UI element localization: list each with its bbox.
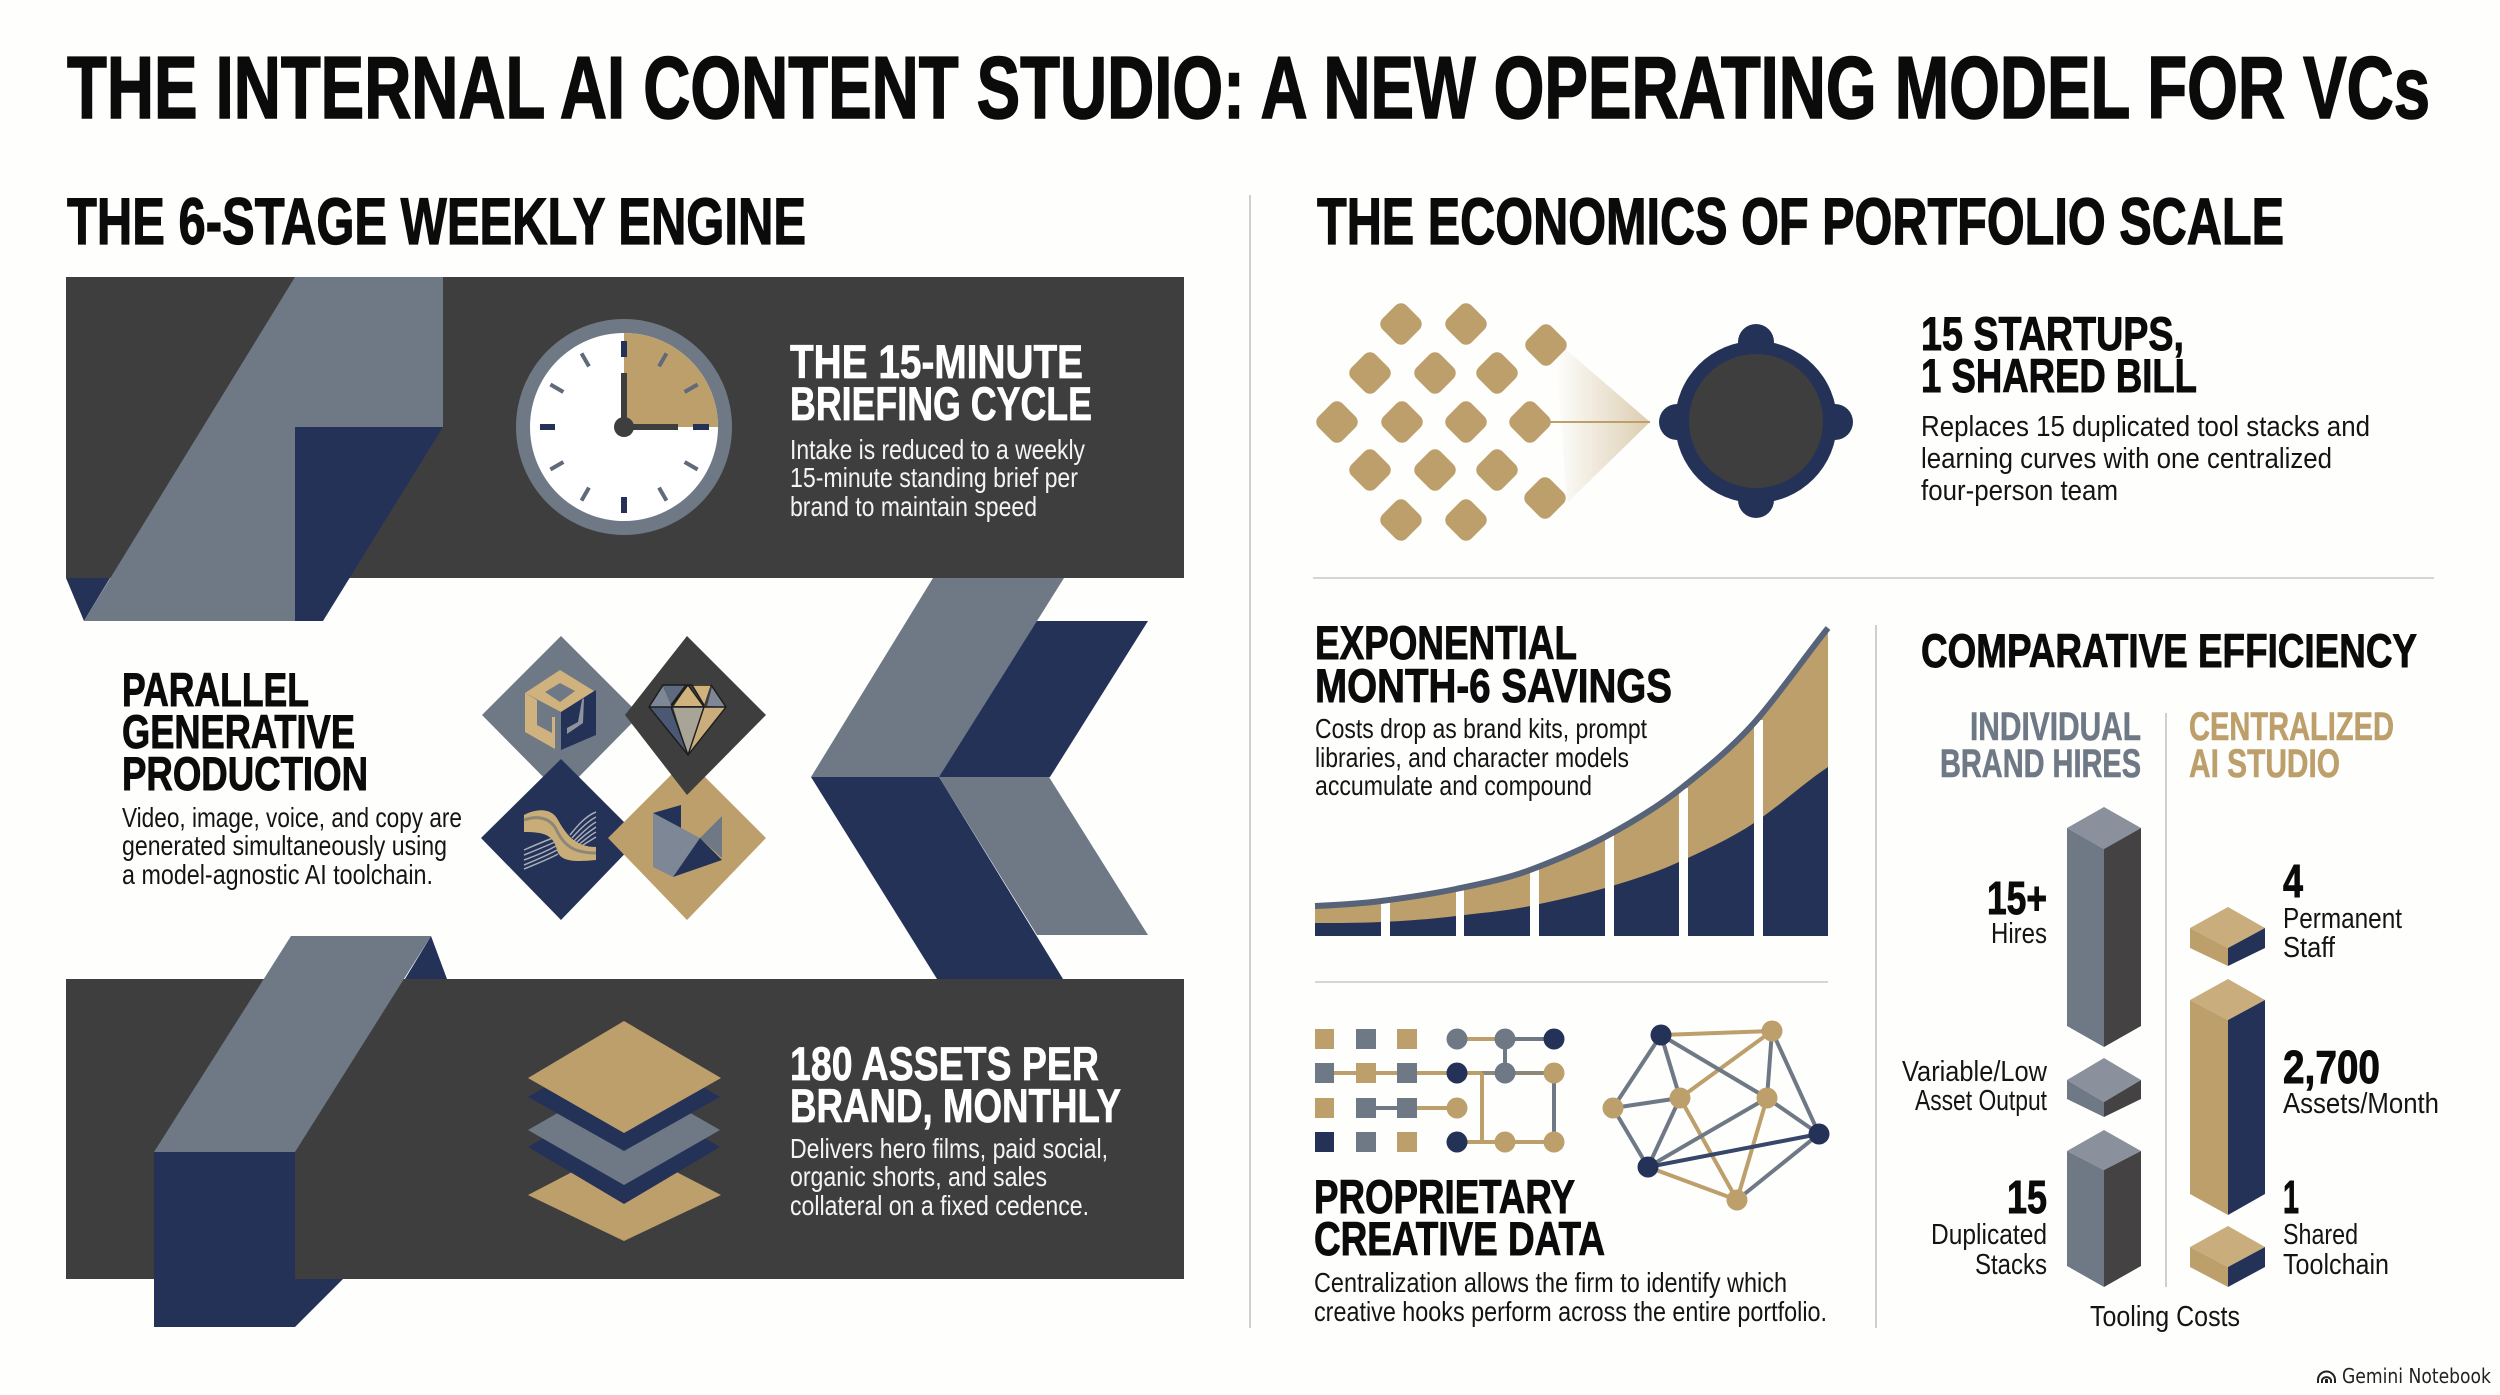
label: tooling costs: Tooling Costs bbox=[2090, 1301, 2240, 1333]
labels: individual: Asset Output bbox=[1915, 1085, 2047, 1117]
heading: weekly engine: THE 6-STAGE WEEKLY ENGINE bbox=[67, 184, 806, 258]
text: assets per brand: Delivers hero films, paid social, bbox=[790, 1133, 1108, 1164]
column heading: individual brand hires: INDIVIDUAL bbox=[1970, 705, 2141, 749]
text: exponential savings: accumulate and compound bbox=[1315, 770, 1592, 801]
column heading: centralized AI studio: AI STUDIO bbox=[2189, 742, 2340, 786]
icon: clock bbox=[516, 319, 732, 535]
labels: centralized: Staff bbox=[2283, 932, 2336, 964]
labels: individual: Stacks bbox=[1975, 1249, 2047, 1281]
labels: centralized bbox=[2283, 855, 2439, 1281]
text: exponential savings: MONTH-6 SAVINGS bbox=[1315, 659, 1672, 712]
icons: four production diamonds bbox=[481, 636, 766, 920]
text: assets per brand: BRAND, MONTHLY bbox=[790, 1079, 1121, 1132]
labels: centralized: Assets/Month bbox=[2283, 1088, 2439, 1120]
labels: individual: Variable/Low bbox=[1902, 1056, 2048, 1088]
text: 15 startups, 1 shared bill: four-person team bbox=[1921, 475, 2118, 507]
column divider bbox=[1249, 195, 1251, 1328]
text: assets per brand: organic shorts, and sales bbox=[790, 1161, 1047, 1192]
column heading: centralized AI studio: CENTRALIZED bbox=[2189, 705, 2394, 749]
isometric bars: centralized bbox=[2190, 907, 2265, 1287]
text: assets per brand: 180 ASSETS PER bbox=[790, 1037, 1099, 1090]
labels: centralized: 1 bbox=[2283, 1171, 2299, 1223]
column heading: individual brand hires: BRAND HIRES bbox=[1940, 742, 2141, 786]
labels: individual: Hires bbox=[1991, 918, 2047, 950]
text: exponential savings: EXPONENTIAL bbox=[1315, 616, 1577, 669]
text: proprietary creative data bbox=[1314, 1170, 1827, 1327]
labels: centralized: 2,700 bbox=[2283, 1041, 2380, 1093]
panel: comparative efficiency bbox=[1902, 624, 2439, 1333]
text: briefing cycle: THE 15-MINUTE bbox=[790, 335, 1083, 388]
text: 15 startups, 1 shared bill bbox=[1921, 307, 2370, 507]
diagram: network graph bbox=[1602, 1020, 1830, 1210]
icon: folded shape bbox=[653, 805, 722, 877]
text: proprietary creative data: CREATIVE DATA bbox=[1314, 1212, 1605, 1265]
text: exponential savings bbox=[1315, 616, 1672, 801]
diagram: grid to circuit bbox=[1315, 1028, 1564, 1152]
panel: proprietary creative data bbox=[1314, 1020, 1830, 1327]
text: briefing cycle: brand to maintain speed bbox=[790, 491, 1037, 522]
text: 15 startups, 1 shared bill: Replaces 15 duplicated tool stacks and bbox=[1921, 411, 2370, 443]
text: parallel generative production: PARALLEL bbox=[122, 663, 309, 716]
text: assets per brand: collateral on a fixed cedence. bbox=[790, 1190, 1089, 1221]
panel: 180 assets per brand bbox=[66, 936, 1184, 1327]
text: proprietary creative data: PROPRIETARY bbox=[1314, 1170, 1575, 1223]
area bar chart bbox=[1315, 628, 1828, 937]
labels: individual: 15 bbox=[2007, 1171, 2047, 1223]
graphic: 15 startups converging into one hub bbox=[1313, 300, 1853, 544]
text: briefing cycle: 15-minute standing brief per bbox=[790, 462, 1078, 493]
text: briefing cycle bbox=[790, 335, 1092, 522]
panel: 15-minute briefing cycle bbox=[66, 277, 1184, 621]
labels: individual bbox=[1902, 872, 2048, 1281]
text: 15 startups, 1 shared bill: 1 SHARED BILL bbox=[1921, 349, 2197, 402]
icon: gem bbox=[649, 684, 726, 755]
labels: centralized: Shared bbox=[2283, 1219, 2358, 1251]
text: parallel generative production: GENERATIVE bbox=[122, 705, 355, 758]
labels: centralized: Permanent bbox=[2283, 903, 2402, 935]
column heading: individual brand hires bbox=[1940, 705, 2141, 786]
text: parallel generative production bbox=[122, 663, 462, 890]
text: 15 startups, 1 shared bill: learning curves with one centralized bbox=[1921, 443, 2332, 475]
column heading: centralized AI studio bbox=[2189, 705, 2394, 786]
isometric bars: individual bbox=[2067, 807, 2141, 1287]
text: parallel generative production: PRODUCTION bbox=[122, 747, 368, 800]
labels: individual: 15+ bbox=[1987, 872, 2047, 924]
icon: wave bbox=[524, 810, 596, 869]
text: parallel generative production: a model-agnostic AI toolchain. bbox=[122, 859, 433, 890]
panel: chevron ribbon bbox=[811, 578, 1148, 979]
text: parallel generative production: generated simultaneously using bbox=[122, 830, 447, 861]
labels: centralized: 4 bbox=[2283, 855, 2303, 907]
icon: stacked layers bbox=[528, 1021, 721, 1241]
text: parallel generative production: Video, image, voice, and copy are bbox=[122, 802, 462, 833]
text: 15 startups, 1 shared bill: 15 STARTUPS, bbox=[1921, 307, 2184, 360]
icon: cube bbox=[525, 670, 596, 750]
text: assets per brand bbox=[790, 1037, 1121, 1221]
text: proprietary creative data: creative hooks perform across the entire portfolio. bbox=[1314, 1296, 1827, 1327]
text: briefing cycle: Intake is reduced to a weekly bbox=[790, 434, 1085, 465]
panel: exponential savings bbox=[1315, 616, 1828, 937]
text: proprietary creative data: Centralization allows the firm to identify which bbox=[1314, 1267, 1787, 1298]
text: briefing cycle: BRIEFING CYCLE bbox=[790, 377, 1092, 430]
labels: centralized: Toolchain bbox=[2283, 1249, 2389, 1281]
icon: central hub bbox=[1659, 324, 1853, 518]
text: exponential savings: libraries, and character models bbox=[1315, 742, 1629, 773]
text: exponential savings: Costs drop as brand kits, prompt bbox=[1315, 713, 1647, 744]
labels: individual: Duplicated bbox=[1931, 1219, 2047, 1251]
